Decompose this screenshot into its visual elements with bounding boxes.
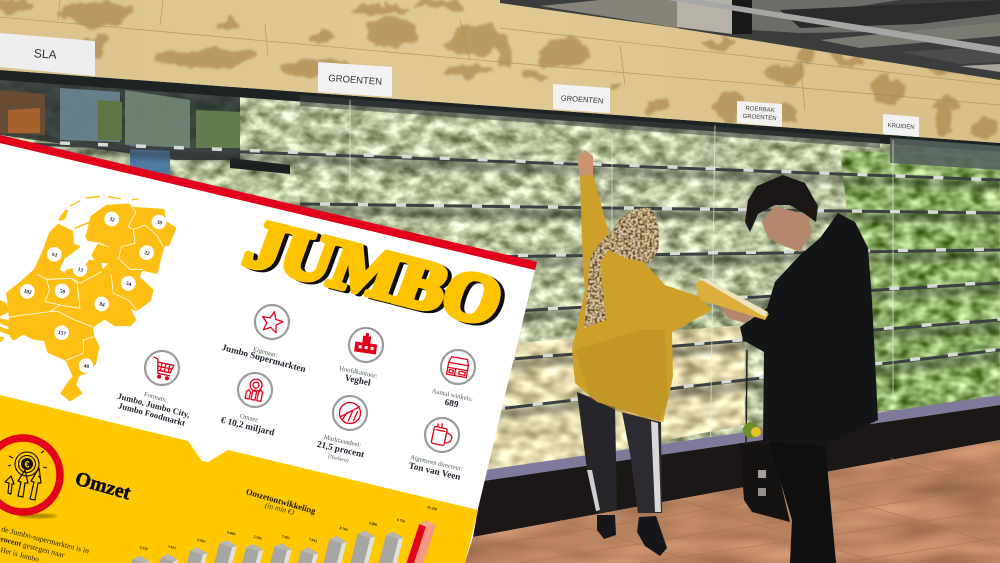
bar value labels: 5.280 — [253, 535, 262, 541]
icon: market share — [333, 396, 367, 430]
shadows under shelf rails — [0, 149, 1000, 416]
icon: shopping cart — [145, 351, 179, 385]
fact: Eigenaar: Eigenaar: — [252, 346, 279, 359]
chart bars — [132, 505, 437, 563]
map: Zeeland islands and Wadden — [0, 196, 139, 342]
card: yellow section — [0, 395, 478, 563]
fact: Marktaandeel: (Nielsen) — [327, 453, 349, 464]
bar 3 — [187, 547, 207, 563]
map: province shapes — [7, 205, 175, 400]
upper valance dark band — [0, 70, 1000, 152]
bar value labels: 5.259 — [139, 545, 148, 551]
fact: Algemeen directeur: Algemeen directeur: — [409, 454, 464, 473]
fact: Algemeen directeur — [408, 418, 464, 482]
map: store count badges: 58 — [59, 288, 66, 296]
refrigerator base — [483, 395, 1000, 481]
omzet badge icon — [0, 438, 60, 518]
map: province borders — [8, 205, 163, 360]
sign: SLA: SLA — [33, 46, 57, 62]
fact: Hoofdkantoor: Veghel — [344, 372, 372, 388]
fact: Aantal winkels — [431, 350, 475, 409]
map: store count badges: 48 — [83, 363, 90, 370]
cream produce rows lower left — [485, 325, 745, 475]
chart: omzetontwikkeling — [132, 486, 437, 563]
fact: Marktaandeel: 21,5 procent — [316, 439, 366, 460]
omzet heading: Omzet — [73, 468, 133, 505]
sign: ROERBAK GROENTEN — [737, 101, 782, 127]
sign: GROENTEN — [318, 62, 392, 97]
wood plank seams — [0, 0, 1000, 110]
fact: Aantal winkels: Aantal winkels: — [431, 388, 474, 403]
sign: KRUIDEN: KRUIDEN — [887, 123, 915, 131]
bar value labels: 6.562 — [197, 538, 206, 544]
fact: Hoofdkantoor — [339, 328, 383, 388]
bar 6 — [270, 543, 292, 563]
icon: directeur mug — [425, 418, 459, 452]
green produce rows right — [840, 150, 1000, 412]
map of the Netherlands — [0, 196, 175, 400]
fact: Omzet: Omzet: — [239, 413, 260, 424]
wooden wall — [0, 0, 1000, 146]
fact: Algemeen directeur: Ton van Veen — [408, 460, 462, 482]
shelf rails — [0, 143, 1000, 410]
ceiling beam — [668, 0, 1000, 54]
sign: GROENTEN — [553, 84, 610, 113]
icon: rising arrows — [5, 468, 41, 500]
bar 1 — [132, 556, 150, 563]
woman in yellow coat — [572, 150, 712, 556]
man: hair — [745, 175, 818, 232]
sign: GROENTEN: GROENTEN — [561, 94, 604, 105]
sign: ROERBAK GROENTEN: ROERBAK — [745, 106, 775, 114]
bar value labels — [139, 505, 437, 551]
price tags on rails — [60, 143, 1000, 409]
fact: Eigenaar — [221, 305, 307, 374]
woman: coat — [572, 175, 712, 422]
fact: Omzet — [220, 373, 276, 438]
bar 11 highlighted — [407, 521, 436, 563]
card: red top band — [0, 135, 537, 270]
icon: revenue — [238, 373, 272, 407]
map: store count badges: 13 — [77, 267, 84, 274]
sign: SLA — [0, 33, 95, 76]
woman: shoes — [597, 515, 616, 539]
man: jacket — [740, 213, 878, 446]
woman: hand — [577, 150, 593, 176]
icon: store — [441, 350, 475, 384]
bar 2 — [160, 554, 178, 563]
bar 10 — [379, 532, 403, 563]
map: store count badges: 54 — [125, 281, 132, 288]
bar value labels: 7.022 — [281, 534, 291, 540]
woman: leopard headscarf — [584, 208, 659, 328]
bar 7 — [298, 547, 318, 563]
bar value labels: 8.750 — [396, 518, 406, 524]
map: store count badges: 157 — [57, 330, 67, 338]
map: store count badges: 102 — [23, 288, 32, 296]
fact: Aantal winkels: 689 — [444, 397, 460, 409]
chart title: Omzetontwikkeling — [245, 486, 318, 516]
map: store count badges: 22 — [144, 250, 151, 257]
chart: omzetontwikkeling: (in mln €) — [264, 501, 296, 517]
wall signs — [0, 33, 919, 137]
bar value labels: 8.700 — [339, 526, 348, 532]
map: store count badges: 84 — [99, 301, 106, 309]
man: trousers — [768, 440, 836, 563]
fact: Hoofdkantoor: Hoofdkantoor: — [339, 365, 378, 380]
map: store count badges: 61 — [51, 252, 58, 259]
bar 8 — [323, 536, 347, 563]
infographic card — [0, 135, 537, 563]
icon: euro coin — [8, 451, 47, 478]
JUMBO logo: JUMBO — [240, 207, 517, 342]
bar value labels: 9.080 — [368, 521, 378, 527]
shelf unit produce — [0, 70, 1000, 470]
card: white page — [0, 143, 535, 563]
bar value labels: 10.230 — [427, 505, 437, 512]
map: store count badges: 30 — [156, 219, 163, 227]
fact: Formats: Formats: — [143, 391, 168, 404]
man in black jacket — [695, 175, 878, 563]
sign: ROERBAK GROENTEN: GROENTEN — [742, 114, 777, 122]
fact: Formats — [117, 351, 191, 428]
omzet body text: de Jumbo-supermarkten is in — [0, 524, 90, 556]
man: hand — [717, 297, 762, 323]
man: neck and face — [762, 206, 812, 252]
bar 9 — [350, 531, 375, 563]
icon: headquarters building — [349, 328, 383, 362]
fact: Marktaandeel — [316, 396, 367, 464]
omzet badge icon: € — [24, 460, 30, 470]
woman: trousers — [577, 392, 617, 513]
bar value labels: 5.821 — [167, 544, 177, 550]
sign: KRUIDEN — [883, 114, 919, 137]
fact: Formats: Jumbo Foodmarkt — [117, 400, 187, 428]
bar 5 — [242, 544, 263, 563]
bar value labels: 6.860 — [227, 530, 236, 536]
fact: Marktaandeel: Marktaandeel: — [323, 434, 362, 449]
bar value labels: 7.043 — [308, 537, 318, 543]
JUMBO logo: JUMBO — [236, 205, 513, 340]
floor tiles — [465, 440, 1000, 563]
man: magazine — [695, 279, 769, 320]
map: store count badges — [20, 212, 166, 373]
bar 4 — [214, 540, 237, 563]
wood grain blotches — [0, 0, 998, 137]
fact: Formats: Jumbo, Jumbo City, — [117, 391, 191, 420]
shopping basket — [740, 350, 790, 522]
icon: star — [255, 305, 289, 339]
ceiling and upper right — [480, 0, 1000, 150]
map: store count badges: 32 — [109, 216, 116, 224]
fact: Eigenaar: Jumbo Supermarkten — [221, 342, 307, 374]
fact: Omzet: € 10,2 miljard — [220, 415, 276, 438]
dark glass upper-left section — [0, 75, 240, 160]
sign: GROENTEN: GROENTEN — [328, 73, 383, 88]
glass dividers — [350, 100, 893, 470]
